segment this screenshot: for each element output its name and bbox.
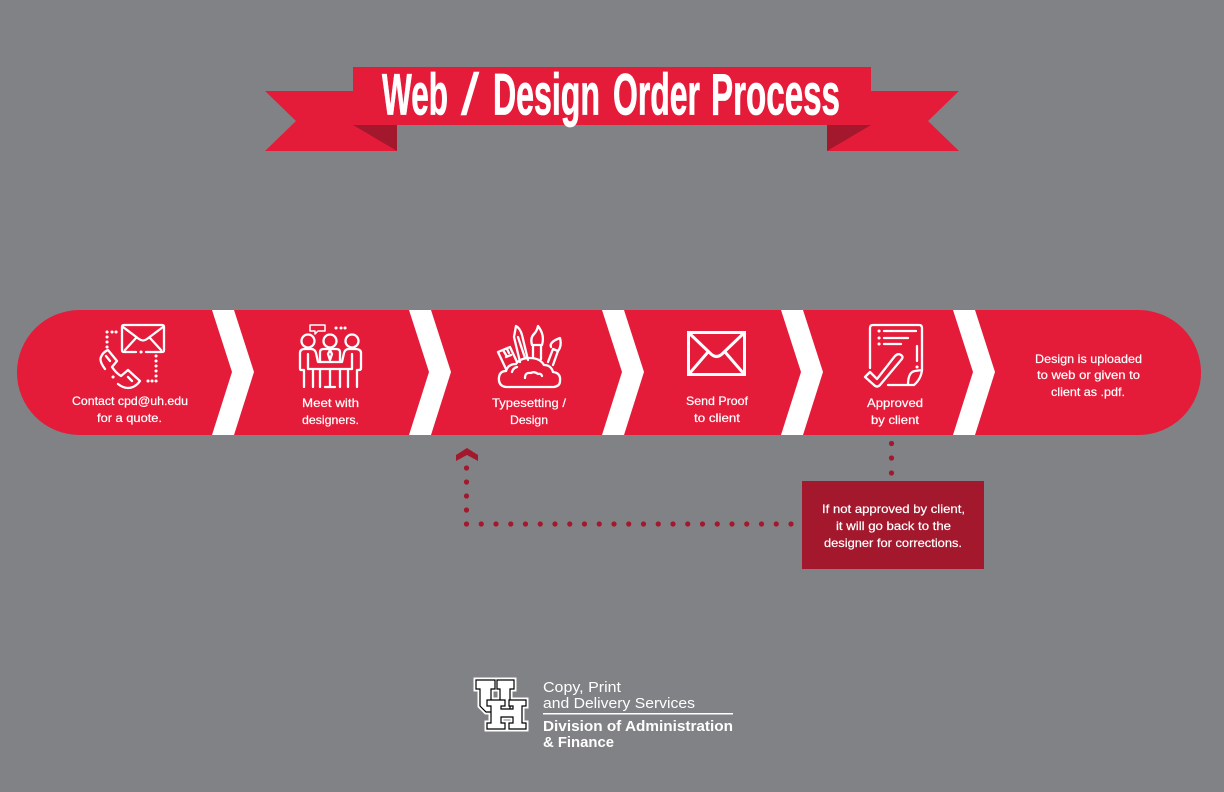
step 2 text: Meet with xyxy=(302,396,359,410)
step 1 text: Contact cpd@uh.edu xyxy=(72,394,188,408)
division name: & Finance xyxy=(543,734,614,751)
step 1 text: for a quote. xyxy=(97,411,162,425)
title: Web xyxy=(382,62,448,128)
step 3 text: Design xyxy=(510,413,548,427)
process bar xyxy=(17,310,1201,435)
department name: and Delivery Services xyxy=(543,695,695,712)
division name: Division of Administration xyxy=(543,718,733,735)
banner centre xyxy=(353,67,871,125)
footer logo xyxy=(476,679,733,751)
step 3 text: Typesetting / xyxy=(492,396,567,410)
banner right tail xyxy=(827,91,959,151)
division name xyxy=(543,718,733,751)
banner left fold xyxy=(353,125,397,151)
icon: approved document xyxy=(865,325,922,386)
title: Process xyxy=(711,62,840,128)
chevron 3 xyxy=(602,310,644,435)
chevron 4 xyxy=(781,310,823,435)
step 5 text xyxy=(867,396,923,427)
icon: meeting with designers xyxy=(300,325,361,387)
icon: typesetting and design tools xyxy=(498,326,561,387)
step 2 text: designers. xyxy=(302,413,359,427)
step 6 text: to web or given to xyxy=(1037,368,1140,382)
chevron 1 xyxy=(212,310,254,435)
icon: phone and envelope xyxy=(100,325,164,388)
step 4 text: to client xyxy=(694,411,741,425)
step 5 text: by client xyxy=(871,413,920,427)
corrections note: If not approved by client, xyxy=(822,502,965,516)
red pill xyxy=(17,310,1201,435)
dotted connector from approval to note xyxy=(889,441,894,476)
chevron 5 xyxy=(953,310,995,435)
corrections note xyxy=(802,481,984,569)
step 6 text xyxy=(1035,352,1142,399)
chevron 2 xyxy=(409,310,451,435)
step 1 text xyxy=(72,394,188,425)
icon: UH mark xyxy=(476,680,526,729)
step 2 text xyxy=(302,396,359,427)
title xyxy=(382,62,840,128)
department name: Copy, Print xyxy=(543,679,622,696)
banner left tail xyxy=(265,91,397,151)
corrections note: designer for corrections. xyxy=(824,536,962,550)
title: / xyxy=(461,62,480,128)
dotted return arrow xyxy=(456,448,794,527)
title banner xyxy=(265,62,959,151)
step 4 text xyxy=(686,394,749,425)
step 6 text: client as .pdf. xyxy=(1051,385,1125,399)
step 5 text: Approved xyxy=(867,396,923,410)
banner right fold xyxy=(827,125,871,151)
title: Design xyxy=(493,62,600,128)
step 3 text xyxy=(492,396,567,427)
icon: envelope xyxy=(688,332,744,374)
corrections note: it will go back to the xyxy=(836,519,951,533)
step 6 text: Design is uploaded xyxy=(1035,352,1142,366)
step 4 text: Send Proof xyxy=(686,394,749,408)
title: Order xyxy=(613,62,700,128)
department name xyxy=(543,679,695,712)
